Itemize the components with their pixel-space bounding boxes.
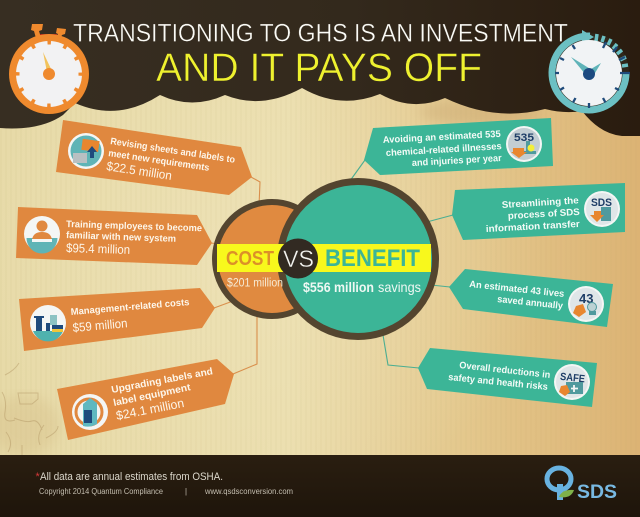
- text: [106, 136, 236, 183]
- text: familiar with new system: [66, 230, 176, 245]
- footnote asterisk: *: [36, 471, 40, 483]
- text: [383, 129, 502, 169]
- divider: |: [185, 487, 187, 496]
- website: www.qsdsconversion.com: [204, 487, 293, 496]
- cost total: $201 million: [227, 278, 283, 290]
- vs badge: [278, 238, 318, 278]
- header band: [0, 0, 640, 136]
- icon: teal clock: [549, 30, 630, 113]
- text: [486, 195, 580, 235]
- text: [448, 360, 551, 393]
- icon: label equipment: [72, 394, 108, 430]
- title: [73, 20, 568, 90]
- copyright: Copyright 2014 Quantum Compliance: [39, 487, 163, 496]
- text: [70, 297, 190, 335]
- text: $24.1 million: [115, 396, 185, 423]
- panel: streamlining process: [452, 183, 625, 240]
- title line 1: TRANSITIONING TO GHS IS AN INVESTMENT: [73, 20, 568, 48]
- yellow band: [217, 244, 431, 272]
- benefit label: BENEFIT: [325, 245, 420, 272]
- panel: upgrading labels: [57, 359, 234, 440]
- icon: 535: 535: [514, 132, 534, 144]
- text: information transfer: [486, 219, 580, 235]
- text: [469, 279, 565, 312]
- icon: sds: [584, 191, 620, 227]
- icon: trainee: [24, 216, 60, 253]
- text: chemical-related illnesses: [386, 141, 502, 159]
- text: Overall reductions in: [459, 360, 551, 381]
- benefit circle: [280, 182, 436, 336]
- text: An estimated 43 lives: [469, 279, 565, 300]
- text: Avoiding an estimated 535: [383, 129, 502, 146]
- text: Upgrading labels and: [111, 366, 214, 396]
- benefit total: savings: [378, 279, 421, 295]
- text: label equipment: [112, 382, 192, 409]
- vs badge: VS: [283, 246, 314, 273]
- cost label: COST: [226, 248, 274, 270]
- text: Training employees to become: [66, 219, 202, 234]
- text: and injuries per year: [412, 153, 502, 169]
- text: Revising sheets and labels to: [110, 136, 236, 166]
- icon: sds: SDS: [591, 197, 612, 209]
- text: Management-related costs: [70, 297, 190, 318]
- title line 2: AND IT PAYS OFF: [156, 46, 482, 90]
- panel: lives saved: [449, 269, 613, 327]
- icon: safe: SAFE: [559, 371, 586, 385]
- connector lines: cost: [211, 177, 260, 374]
- icon: 43: [568, 286, 604, 322]
- text: Streamlining the: [502, 195, 579, 211]
- text: meet new requirements: [108, 148, 210, 174]
- logo: [547, 468, 617, 503]
- logo: SDS: [577, 482, 617, 503]
- footnote: All data are annual estimates from OSHA.: [40, 471, 223, 483]
- panel: avoiding illnesses: [364, 118, 553, 175]
- icon: management: [30, 305, 66, 341]
- text: safety and health risks: [448, 372, 548, 393]
- cost circle: [215, 202, 329, 316]
- benefit total: $556 million: [303, 279, 374, 295]
- panel: revising sheets: [56, 120, 252, 195]
- footer band: [0, 455, 640, 517]
- text: [111, 366, 214, 423]
- cost benefit diagram: [215, 182, 436, 336]
- text: $22.5 million: [106, 159, 173, 183]
- text: $59 million: [72, 316, 128, 335]
- icon: orange stopwatch: [9, 24, 89, 114]
- panel: overall reductions: [418, 348, 597, 407]
- icon: sds sheet: [68, 133, 104, 169]
- text: saved annually: [497, 294, 564, 312]
- panel: management costs: [19, 288, 215, 351]
- text: [66, 219, 202, 257]
- icon: 535: [506, 126, 542, 162]
- icon: safe: [554, 364, 590, 400]
- icon: 43: 43: [579, 291, 593, 306]
- connector lines: benefit: [347, 160, 453, 368]
- panel: training employees: [16, 207, 212, 265]
- text: $95.4 million: [66, 241, 130, 257]
- text: process of SDS: [508, 207, 580, 222]
